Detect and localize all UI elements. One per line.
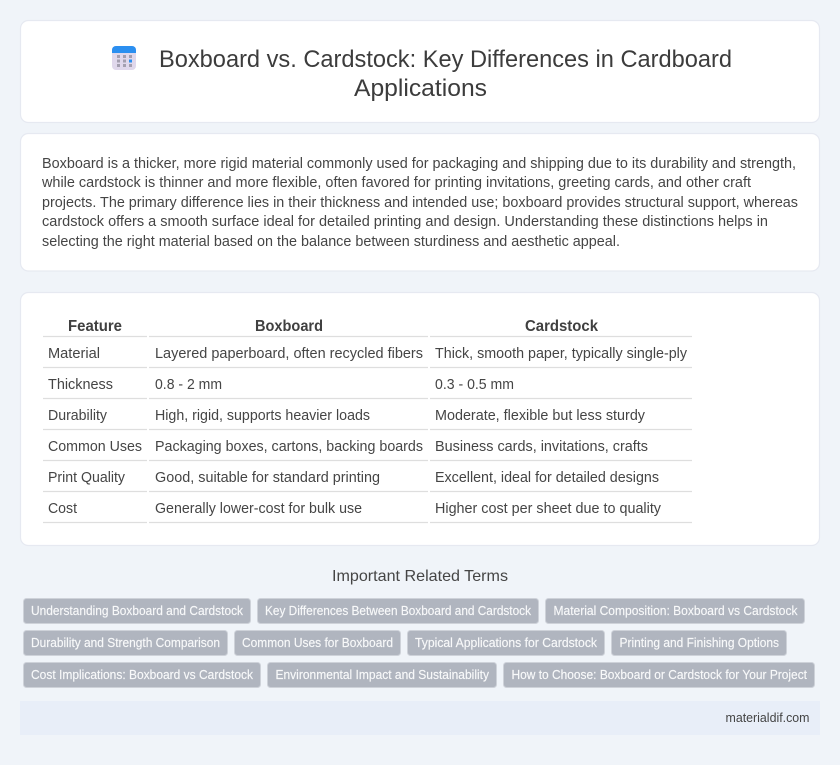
row: durability: Moderate, flexible but less sturdy xyxy=(435,408,646,424)
row: thickness: Thickness xyxy=(48,377,113,393)
row: cost: Higher cost per sheet due to quality xyxy=(435,501,662,517)
row: print quality xyxy=(43,470,692,492)
tag: Durability and Strength Comparison xyxy=(31,636,220,650)
tag xyxy=(24,662,260,688)
summary paragraph: while cardstock is thinner and more flexible, often favored for printing invitations, greeting cards, and other craft xyxy=(41,175,751,191)
tag: How to Choose: Boxboard or Cardstock for Your Project xyxy=(512,668,808,682)
icon: calendar xyxy=(112,46,136,70)
row: common uses xyxy=(43,439,692,460)
summary paragraph: cardstock offers a smooth surface ideal for detailed printing and design. Understanding these distinctions helps in xyxy=(42,214,768,230)
summary paragraph: projects. The primary difference lies in their thickness and intended use; boxboard provides structural support, whereas xyxy=(42,195,798,211)
panel: comparison table xyxy=(20,292,820,546)
title: Boxboard vs. Cardstock: Key Differences in Cardboard xyxy=(159,46,732,73)
tag: Environmental Impact and Sustainability xyxy=(276,668,490,682)
row: durability: High, rigid, supports heavier loads xyxy=(155,408,370,424)
tag xyxy=(408,630,604,656)
tag: Understanding Boxboard and Cardstock xyxy=(31,604,244,618)
row: thickness: 0.3 - 0.5 mm xyxy=(435,377,514,393)
summary paragraph: Boxboard is a thicker, more rigid material commonly used for packaging and shipping due to its durability and strength, xyxy=(42,156,796,172)
tag xyxy=(24,630,228,656)
row: material: Material xyxy=(48,346,100,362)
summary paragraph xyxy=(41,156,798,250)
tag: Printing and Finishing Options xyxy=(620,636,779,650)
related terms tags xyxy=(24,598,814,688)
tag xyxy=(258,598,538,624)
row: common uses: Business cards, invitations, crafts xyxy=(435,439,648,455)
table header row: Cardstock xyxy=(525,318,598,335)
row: common uses: Common Uses xyxy=(48,439,142,455)
row: print quality: Print Quality xyxy=(48,470,126,486)
tag xyxy=(24,598,250,624)
row: material: Thick, smooth paper, typically single-ply xyxy=(435,346,688,362)
table header row xyxy=(43,318,692,336)
row: common uses: Packaging boxes, cartons, backing boards xyxy=(155,439,423,455)
heading: important related terms: Important Related Terms xyxy=(332,568,508,585)
panel: summary xyxy=(20,134,820,271)
row: cost: Generally lower-cost for bulk use xyxy=(155,501,362,517)
tag xyxy=(546,598,804,624)
tag: Key Differences Between Boxboard and Cardstock xyxy=(265,604,532,618)
title xyxy=(159,46,732,102)
row: durability: Durability xyxy=(48,408,108,424)
tag xyxy=(612,630,786,656)
tag xyxy=(234,630,400,656)
panel: header xyxy=(20,20,820,122)
tag xyxy=(268,662,496,688)
row: print quality: Good, suitable for standard printing xyxy=(155,470,380,486)
tag: Common Uses for Boxboard xyxy=(242,636,393,650)
tag xyxy=(504,662,814,688)
title: Applications xyxy=(354,75,487,102)
row: cost: Cost xyxy=(48,501,77,517)
row: thickness: 0.8 - 2 mm xyxy=(155,377,222,393)
row: thickness xyxy=(43,377,692,398)
row: material: Layered paperboard, often recycled fibers xyxy=(155,346,423,362)
row: print quality: Excellent, ideal for detailed designs xyxy=(435,470,659,486)
table header row: Boxboard xyxy=(255,318,323,335)
tag: Cost Implications: Boxboard vs Cardstock xyxy=(31,668,254,682)
table header row: Feature xyxy=(68,318,122,335)
row: material xyxy=(43,346,692,368)
footer xyxy=(20,701,820,735)
summary paragraph: selecting the right material based on the balance between sturdiness and aesthetic appeal. xyxy=(42,234,620,250)
tag: Material Composition: Boxboard vs Cardstock xyxy=(554,604,798,618)
tag: Typical Applications for Cardstock xyxy=(415,636,598,650)
row: cost xyxy=(43,501,692,522)
footer: materialdif.com xyxy=(726,711,810,725)
row: durability xyxy=(43,408,692,430)
